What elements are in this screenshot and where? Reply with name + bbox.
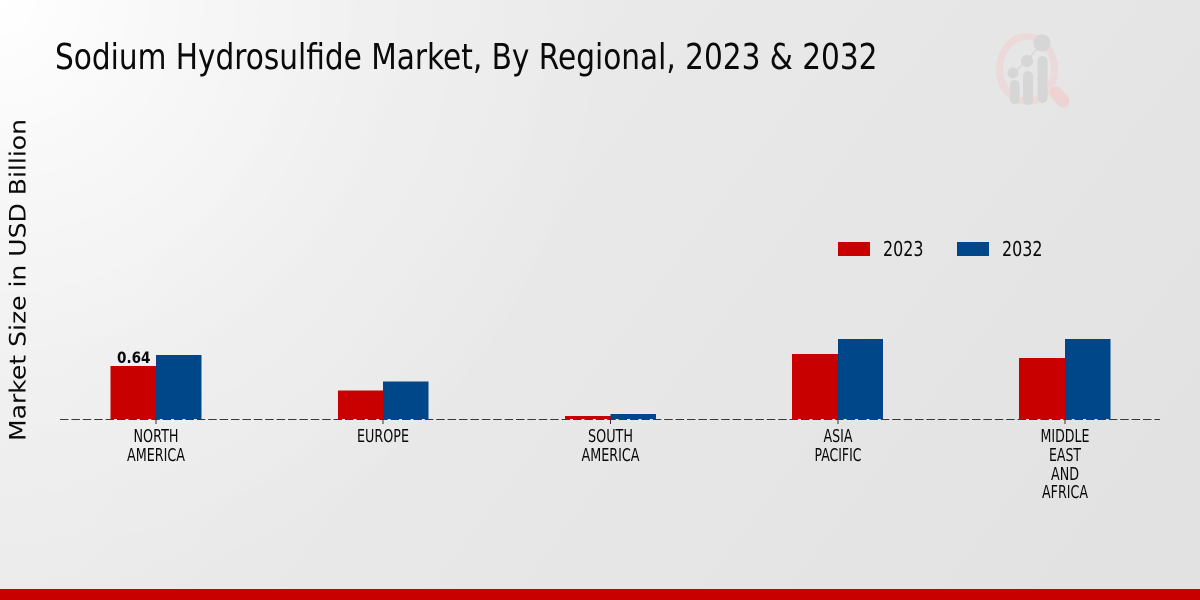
label: South America: SOUTH: [588, 427, 633, 447]
legend item: 2023: 2023: [883, 237, 924, 261]
label: Middle East and Africa: EAST: [1049, 446, 1081, 466]
label: North America: AMERICA: [127, 446, 185, 466]
bottom accent bar: [0, 589, 1200, 600]
bars: Europe: [338, 382, 428, 419]
logo watermark: [1000, 34, 1063, 105]
legend item: 2023: [838, 237, 924, 261]
label: South America: AMERICA: [582, 446, 640, 466]
value label: 0.64: 0.64: [117, 348, 150, 367]
bars: Middle East and Africa: [1019, 339, 1110, 419]
legend item: 2032: 2032: [1002, 237, 1042, 261]
legend: [838, 237, 1042, 261]
label: Middle East and Africa: [1040, 427, 1090, 503]
label: Asia Pacific: [814, 427, 862, 466]
label: Asia Pacific: PACIFIC: [814, 446, 862, 466]
label: Middle East and Africa: AFRICA: [1042, 483, 1088, 503]
label: Middle East and Africa: MIDDLE: [1040, 427, 1090, 447]
bars: Asia Pacific: [792, 339, 883, 419]
y axis label: Market Size in USD Billion: [6, 119, 32, 441]
label: South America: [582, 427, 640, 466]
title: Sodium Hydrosulfide Market, By Regional, 2023 & 2032: [55, 37, 878, 78]
legend item: 2032: [957, 237, 1042, 261]
label: North America: NORTH: [134, 427, 178, 447]
label: North America: [127, 427, 185, 466]
bars: South America: [565, 414, 656, 419]
x axis labels: [127, 427, 1090, 503]
label: Europe: EUROPE: [357, 427, 409, 447]
bar chart: [60, 339, 1160, 424]
bars: North America: [110, 355, 202, 419]
label: Middle East and Africa: AND: [1051, 465, 1079, 485]
label: Asia Pacific: ASIA: [824, 427, 853, 447]
